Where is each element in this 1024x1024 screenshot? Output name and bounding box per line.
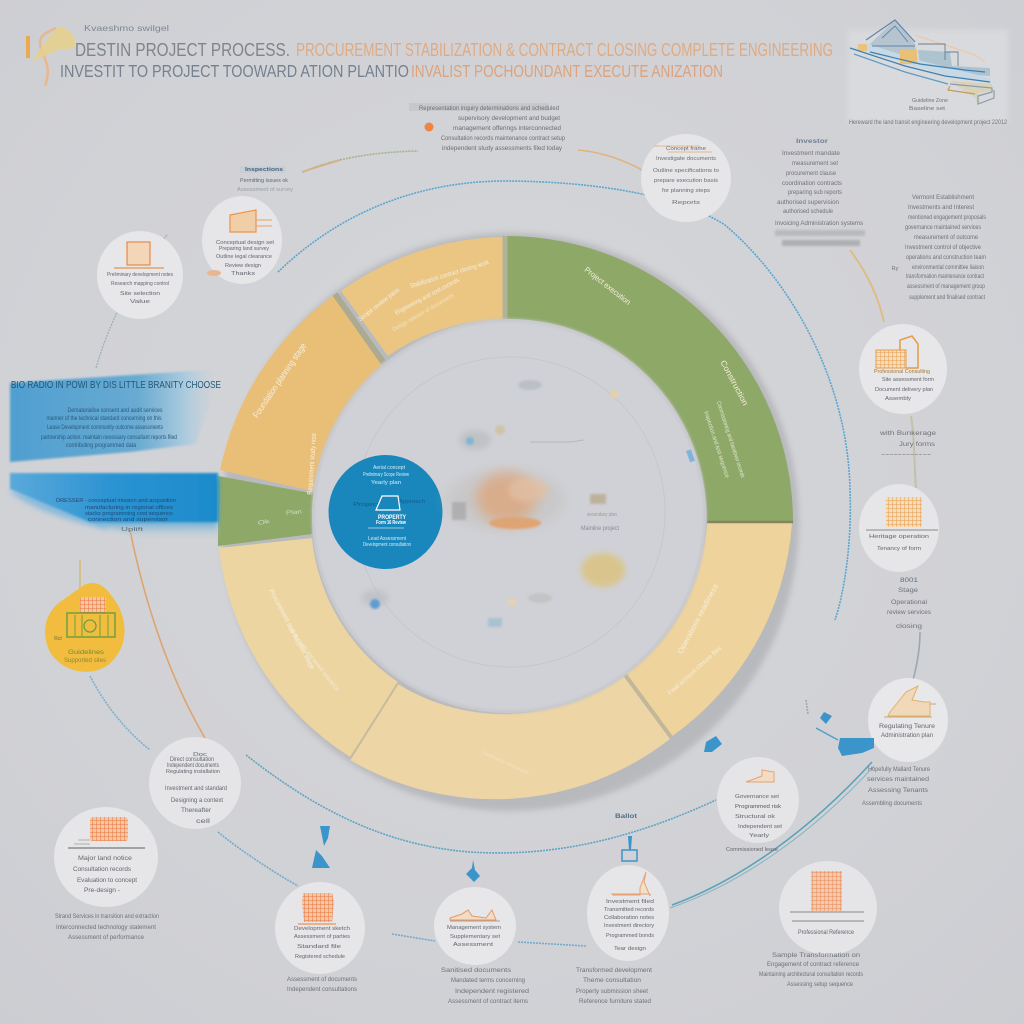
node: left lower building: Major land notice <box>78 856 133 862</box>
node: bottom centre right: Collaboration notes <box>604 915 654 921</box>
node: left upper-lower text: Thereafter <box>181 808 211 814</box>
text block: left lower caption: Strand Services in transition and extraction <box>55 913 159 920</box>
node: lower right near ring: Commissioned lease <box>726 847 778 853</box>
node: top left building <box>97 231 183 319</box>
central diagram: secondary plan <box>587 512 617 518</box>
text block: right lower caption: closing <box>896 623 922 630</box>
node: bottom centre terrain: Management system <box>447 925 501 931</box>
text block: right middle caption: with Bunkerage <box>879 430 936 437</box>
text block: top centre: Consultation records maintenance contract setup <box>441 135 565 142</box>
ring labels: Plan <box>286 509 302 517</box>
ring labels: Engineering and cost controls <box>394 276 461 317</box>
node: right middle building <box>859 484 939 572</box>
node: top left building: Preliminary development notes <box>107 272 173 278</box>
text block: top centre: supervisory development and budget <box>458 115 560 122</box>
node: lower right near ring <box>717 757 799 853</box>
blue panel two: stacks programming cost sequence <box>85 511 173 517</box>
node: bottom right tower: Professional Reference <box>798 930 855 936</box>
segment: cream right <box>622 523 792 737</box>
central diagram: Mainline project <box>581 526 619 532</box>
ring labels: Final account closure files <box>667 644 724 697</box>
node: right middle building: Tenancy of form <box>877 546 921 552</box>
line: orange left drop <box>130 530 205 738</box>
blue hub circle: PROPERTY <box>378 514 407 521</box>
text block: upper right column: coordination contracts <box>782 180 843 187</box>
text block: right column: environmental committee liaison <box>912 264 984 271</box>
node: top centre right: for planning steps <box>662 188 710 194</box>
text block: right lower caption: Operational <box>891 599 928 606</box>
inner hub <box>312 319 706 713</box>
label: top left caption <box>237 166 293 193</box>
text block: bottom centre right caption: Transformed development <box>576 967 652 974</box>
ring labels: Stabilization contract closing work <box>409 259 490 290</box>
node: bottom left tower: Registered schedule <box>295 954 345 960</box>
text block: right middle caption: ------------ <box>881 451 931 458</box>
label: top left caption: Assessment of survey <box>237 187 293 193</box>
node: top left building: Value <box>130 299 150 305</box>
text block: right column: Vermont Establishment <box>912 194 974 201</box>
text block: upper right column: measurement set <box>792 160 838 167</box>
arc: lower blue orbit <box>246 755 716 853</box>
badge: yellow building: Supported sites <box>64 658 106 664</box>
illustration: building top right: Guideline Zone <box>912 98 948 104</box>
text block: right lower caption: Stage <box>898 587 918 594</box>
text block: right column <box>892 194 987 301</box>
blue hub circle: Lead Assessment <box>368 536 407 542</box>
badge: yellow building: Guidelines <box>68 650 104 656</box>
segment: green small <box>218 476 316 546</box>
blue panel one <box>10 369 222 462</box>
text block: upper right column: Investor <box>796 138 829 145</box>
text block: right middle caption: Jury forms <box>899 441 936 448</box>
title: PROCUREMENT STABILIZATION & CONTRACT CLOSING COMPLETE ENGINEERING <box>296 40 833 60</box>
text block: bottom right caption: Engagement of contract reference <box>767 961 859 968</box>
node: left upper-lower text: Doc <box>193 752 208 758</box>
text block: top centre: management offerings interconnected <box>453 125 561 132</box>
text block: lower right caption: services maintained <box>867 776 929 783</box>
node: right upper building: Site assessment form <box>882 377 934 383</box>
node: lower right near ring: Programmed risk <box>735 804 781 810</box>
text block: right lower caption <box>887 577 932 630</box>
segment: orange top <box>341 237 503 356</box>
text block: right column: governance maintained services <box>905 224 982 231</box>
node: lower right near ring: Governance set <box>735 794 780 800</box>
connector lines <box>80 150 920 946</box>
ring labels: Design release of documents <box>392 293 455 333</box>
title <box>60 24 833 81</box>
node: bottom left tower: Standard file <box>297 944 341 950</box>
node: bottom centre terrain <box>434 887 516 965</box>
node: left lower building <box>54 807 158 907</box>
text block: right column: measurement of outcome <box>914 234 978 241</box>
node: upper left building: Preparing land survey <box>219 246 269 252</box>
node: right upper building: Professional Consulting <box>874 369 930 375</box>
blue hub circle: Aerial concept <box>373 465 406 471</box>
blue hub circle: Form 16 Review <box>376 520 406 526</box>
text block: bottom centre right caption: Property submission sheet <box>576 988 648 995</box>
title: Kvaeshmo swilgel <box>84 24 169 33</box>
blue hub circle: Preliminary Scope Review <box>363 472 409 478</box>
blue hub circle: Project <box>353 502 380 508</box>
segment: cream bottom <box>350 674 670 799</box>
text block: right column: assessment of management group <box>907 283 985 290</box>
arc: teal double line <box>672 762 872 905</box>
text block: bottom right caption: Sample Transformation on <box>772 952 860 959</box>
central diagram <box>361 380 695 627</box>
blue panel one: Dematerialise consent and audit services <box>68 407 163 414</box>
node: left upper-lower text: cell <box>196 819 210 825</box>
small caption: lower centre: Ballot <box>615 813 638 820</box>
ring labels: Procurement and supplier stage <box>267 588 316 671</box>
line: left blue <box>90 676 150 750</box>
blue panel two: manufacturing in regional offices <box>85 505 173 511</box>
badge: yellow building: Rct <box>54 636 62 642</box>
node: left upper-lower text: Regulating installation <box>166 769 220 775</box>
text block: left lower caption <box>55 913 159 941</box>
label: top left caption: Permitting issues ok <box>240 178 288 184</box>
blue panel one: contributing programmed data <box>66 442 136 449</box>
text block: bottom centre right caption: Theme consultation <box>583 977 641 984</box>
ring labels: Operations readiness <box>676 582 720 655</box>
text block: right column: operations and construction team <box>906 254 986 261</box>
node: bottom centre terrain: Assessment <box>453 942 494 948</box>
node: top centre right: Investigate documents <box>656 156 716 162</box>
node: top centre right <box>641 134 731 222</box>
text block: top centre: independent study assessments filed today <box>442 145 563 152</box>
blue panel two: connection and supervisor <box>88 517 168 523</box>
blue hub circle: Approach <box>399 499 425 505</box>
text block: upper right column: Invoicing Administration systems <box>775 220 864 227</box>
node: left upper-lower text: Independent documents <box>167 763 219 769</box>
illustration: building top right: Baseline set <box>909 106 946 112</box>
node: bottom left tower: Development sketch <box>294 926 350 932</box>
text block: bottom centre caption: Sanitised documents <box>441 967 512 974</box>
blue panel one: Lease Development community outcome assessments <box>47 424 164 431</box>
ring labels: Construction <box>718 359 750 407</box>
blue panel one: partnership action: maintain necessary consultant reports filed <box>41 434 177 441</box>
node: left upper-lower text <box>149 737 241 829</box>
text block: upper right column <box>775 138 865 246</box>
node: bottom centre right: Investment filed <box>606 899 654 905</box>
text block: bottom centre right caption <box>576 967 652 1005</box>
text block: bottom right caption <box>759 952 864 988</box>
node: left upper-lower text: Designing a context <box>171 798 223 804</box>
ring labels: Vendor bids and award sequence <box>286 626 340 693</box>
arc: upper blue orbit <box>278 181 850 620</box>
blue hub circle: Development consultation <box>363 542 411 548</box>
ring labels: Scope review pass <box>357 286 401 323</box>
text block: bottom centre caption: Mandated terms concerning <box>451 977 525 984</box>
node: right upper building: Assembly <box>885 396 911 402</box>
text block: lower right caption: Assessing Tenants <box>868 787 929 794</box>
ring labels: Requirement study note <box>307 433 318 495</box>
node: right upper building <box>859 324 947 414</box>
text block: upper right column: preparing sub reports <box>788 189 843 196</box>
node: top left building: Site selection <box>120 291 160 297</box>
node: bottom centre right: Tear design <box>614 946 646 952</box>
text block: bottom centre caption: Assessment of contract items <box>448 998 529 1005</box>
icon: blue figures <box>312 712 874 882</box>
text block: bottom left tower caption: Independent consultations <box>287 986 358 993</box>
text block: bottom right caption: Assessing setup sequence <box>787 981 853 988</box>
node: bottom right tower <box>779 861 877 955</box>
text block: right column: Investments and Interest <box>908 204 974 211</box>
node: right upper building: Document delivery plan <box>875 387 933 393</box>
blue panel two <box>10 473 218 540</box>
text block: bottom centre caption <box>441 967 529 1005</box>
node: right lower house <box>868 678 948 762</box>
text block: right column: Ry <box>892 266 899 272</box>
node: upper left building: Review design <box>225 263 261 269</box>
text block: bottom left tower caption <box>287 976 358 993</box>
illustration: building top right <box>848 20 1008 126</box>
node: bottom centre right: Programmed bonds <box>606 933 654 939</box>
text block: upper right column: authorised schedule <box>783 208 833 215</box>
text block: upper right column: procurement clause <box>786 170 836 177</box>
text block: left lower caption: Interconnected technology statement <box>56 924 156 931</box>
label: top left caption: Inspections <box>245 167 283 173</box>
text block: bottom right caption: Maintaining architectural consultation records <box>759 971 864 978</box>
title: INVALIST POCHOUNDANT EXECUTE ANIZATION <box>411 61 723 81</box>
node: bottom centre terrain: Supplementary set <box>450 934 501 940</box>
node: bottom centre right: Transmitted records <box>604 907 654 913</box>
node: left upper-lower text: Direct consultation <box>170 757 214 763</box>
text block: right middle caption <box>879 430 936 458</box>
text block: right column: supplement and finalised contract <box>909 294 985 301</box>
node: left upper-lower text: Investment and standard <box>165 786 227 792</box>
node: upper left building <box>202 196 282 284</box>
node: lower right near ring: Independent set <box>738 824 783 830</box>
node: left lower building: Consultation records <box>73 867 131 873</box>
node: upper left building: Thanks <box>231 271 255 277</box>
node: upper left building: Conceptual design set <box>216 240 274 246</box>
text block: right column: Investment control of objective <box>905 244 981 251</box>
ring labels: Inspection and test sequence <box>702 410 730 479</box>
badge: yellow building <box>45 583 125 672</box>
segment: orange left <box>220 295 382 492</box>
text block: right lower caption: review services <box>887 609 932 616</box>
node: top centre right: prepare execution basis <box>654 178 718 184</box>
text block: right lower caption: 8001 <box>900 577 918 584</box>
blue panel two: DRESSER - conceptual mission and acquisition <box>56 498 176 504</box>
text block: top centre <box>409 103 565 152</box>
text block: lower right caption: Assembling documents <box>862 800 923 807</box>
ring labels: Ok <box>257 519 272 527</box>
segment: green large <box>507 236 793 521</box>
node: left lower building: Pre-design - <box>84 888 120 894</box>
text block: top centre: Representation inquiry determinations and scheduled <box>419 105 559 112</box>
node: bottom centre right: Investment directory <box>604 923 654 929</box>
node: bottom left tower: Assessment of parties <box>294 934 350 940</box>
text block: bottom left tower caption: Assessment of documents <box>287 976 358 983</box>
segment: cream lower left <box>219 538 398 757</box>
text block: upper right column: authorised supervision <box>777 199 839 206</box>
node: top centre right: Outline specifications to <box>653 168 719 174</box>
ring labels: Commissioning and handover records <box>715 401 745 479</box>
text block: upper right column: Investment mandate <box>782 150 840 157</box>
text block: right column: transformation maintenance contract <box>906 273 984 280</box>
blue hub circle <box>328 455 442 569</box>
ring labels: Foundation planning stage <box>251 341 308 420</box>
title: DESTIN PROJECT PROCESS. <box>75 40 290 60</box>
node: lower right near ring: Structural ok <box>735 814 775 820</box>
node: right middle building: Heritage operation <box>869 534 929 540</box>
node: right lower house: Regulating Tenure <box>879 724 936 730</box>
blue panel one: manner of the technical standard concerning on this <box>46 415 162 422</box>
text block: lower right caption: Hopefully Mallard Tenure <box>868 766 930 773</box>
node: top centre right: Concept frame <box>666 146 706 152</box>
text block: bottom centre right caption: Reference furniture stated <box>579 998 651 1005</box>
node: right lower house: Administration plan <box>881 733 933 739</box>
text block: right column: mentioned engagement proposals <box>908 214 987 221</box>
title: INVESTIT TO PROJECT TOOWARD ATION PLANTIO <box>60 61 409 81</box>
text block: lower right caption <box>862 766 930 807</box>
node: upper left building: Outline legal clearance <box>216 254 272 260</box>
node: bottom centre right <box>587 865 669 961</box>
ring labels: Delivery closeout <box>481 750 530 776</box>
text block: left lower caption: Assessment of performance <box>68 934 144 941</box>
node: left lower building: Evaluation to concept <box>77 878 137 884</box>
blue panel one: BIO RADIO IN POWI BY DIS LITTLE BRANITY CHOOSE <box>11 379 221 391</box>
blue hub circle: Yearly plan <box>371 480 401 486</box>
text block: bottom centre caption: Independent registered <box>455 988 529 995</box>
node: top centre right: Reports <box>672 200 700 206</box>
ring labels <box>251 259 750 776</box>
logo mark <box>26 26 75 86</box>
ring labels: Project execution <box>583 265 632 307</box>
main ring chart <box>218 233 799 811</box>
node: bottom left tower <box>275 882 365 974</box>
node: lower right near ring: Yearly <box>749 833 769 839</box>
node: top left building: Research mapping control <box>111 281 169 287</box>
blue panel two: Uplift <box>121 527 144 533</box>
